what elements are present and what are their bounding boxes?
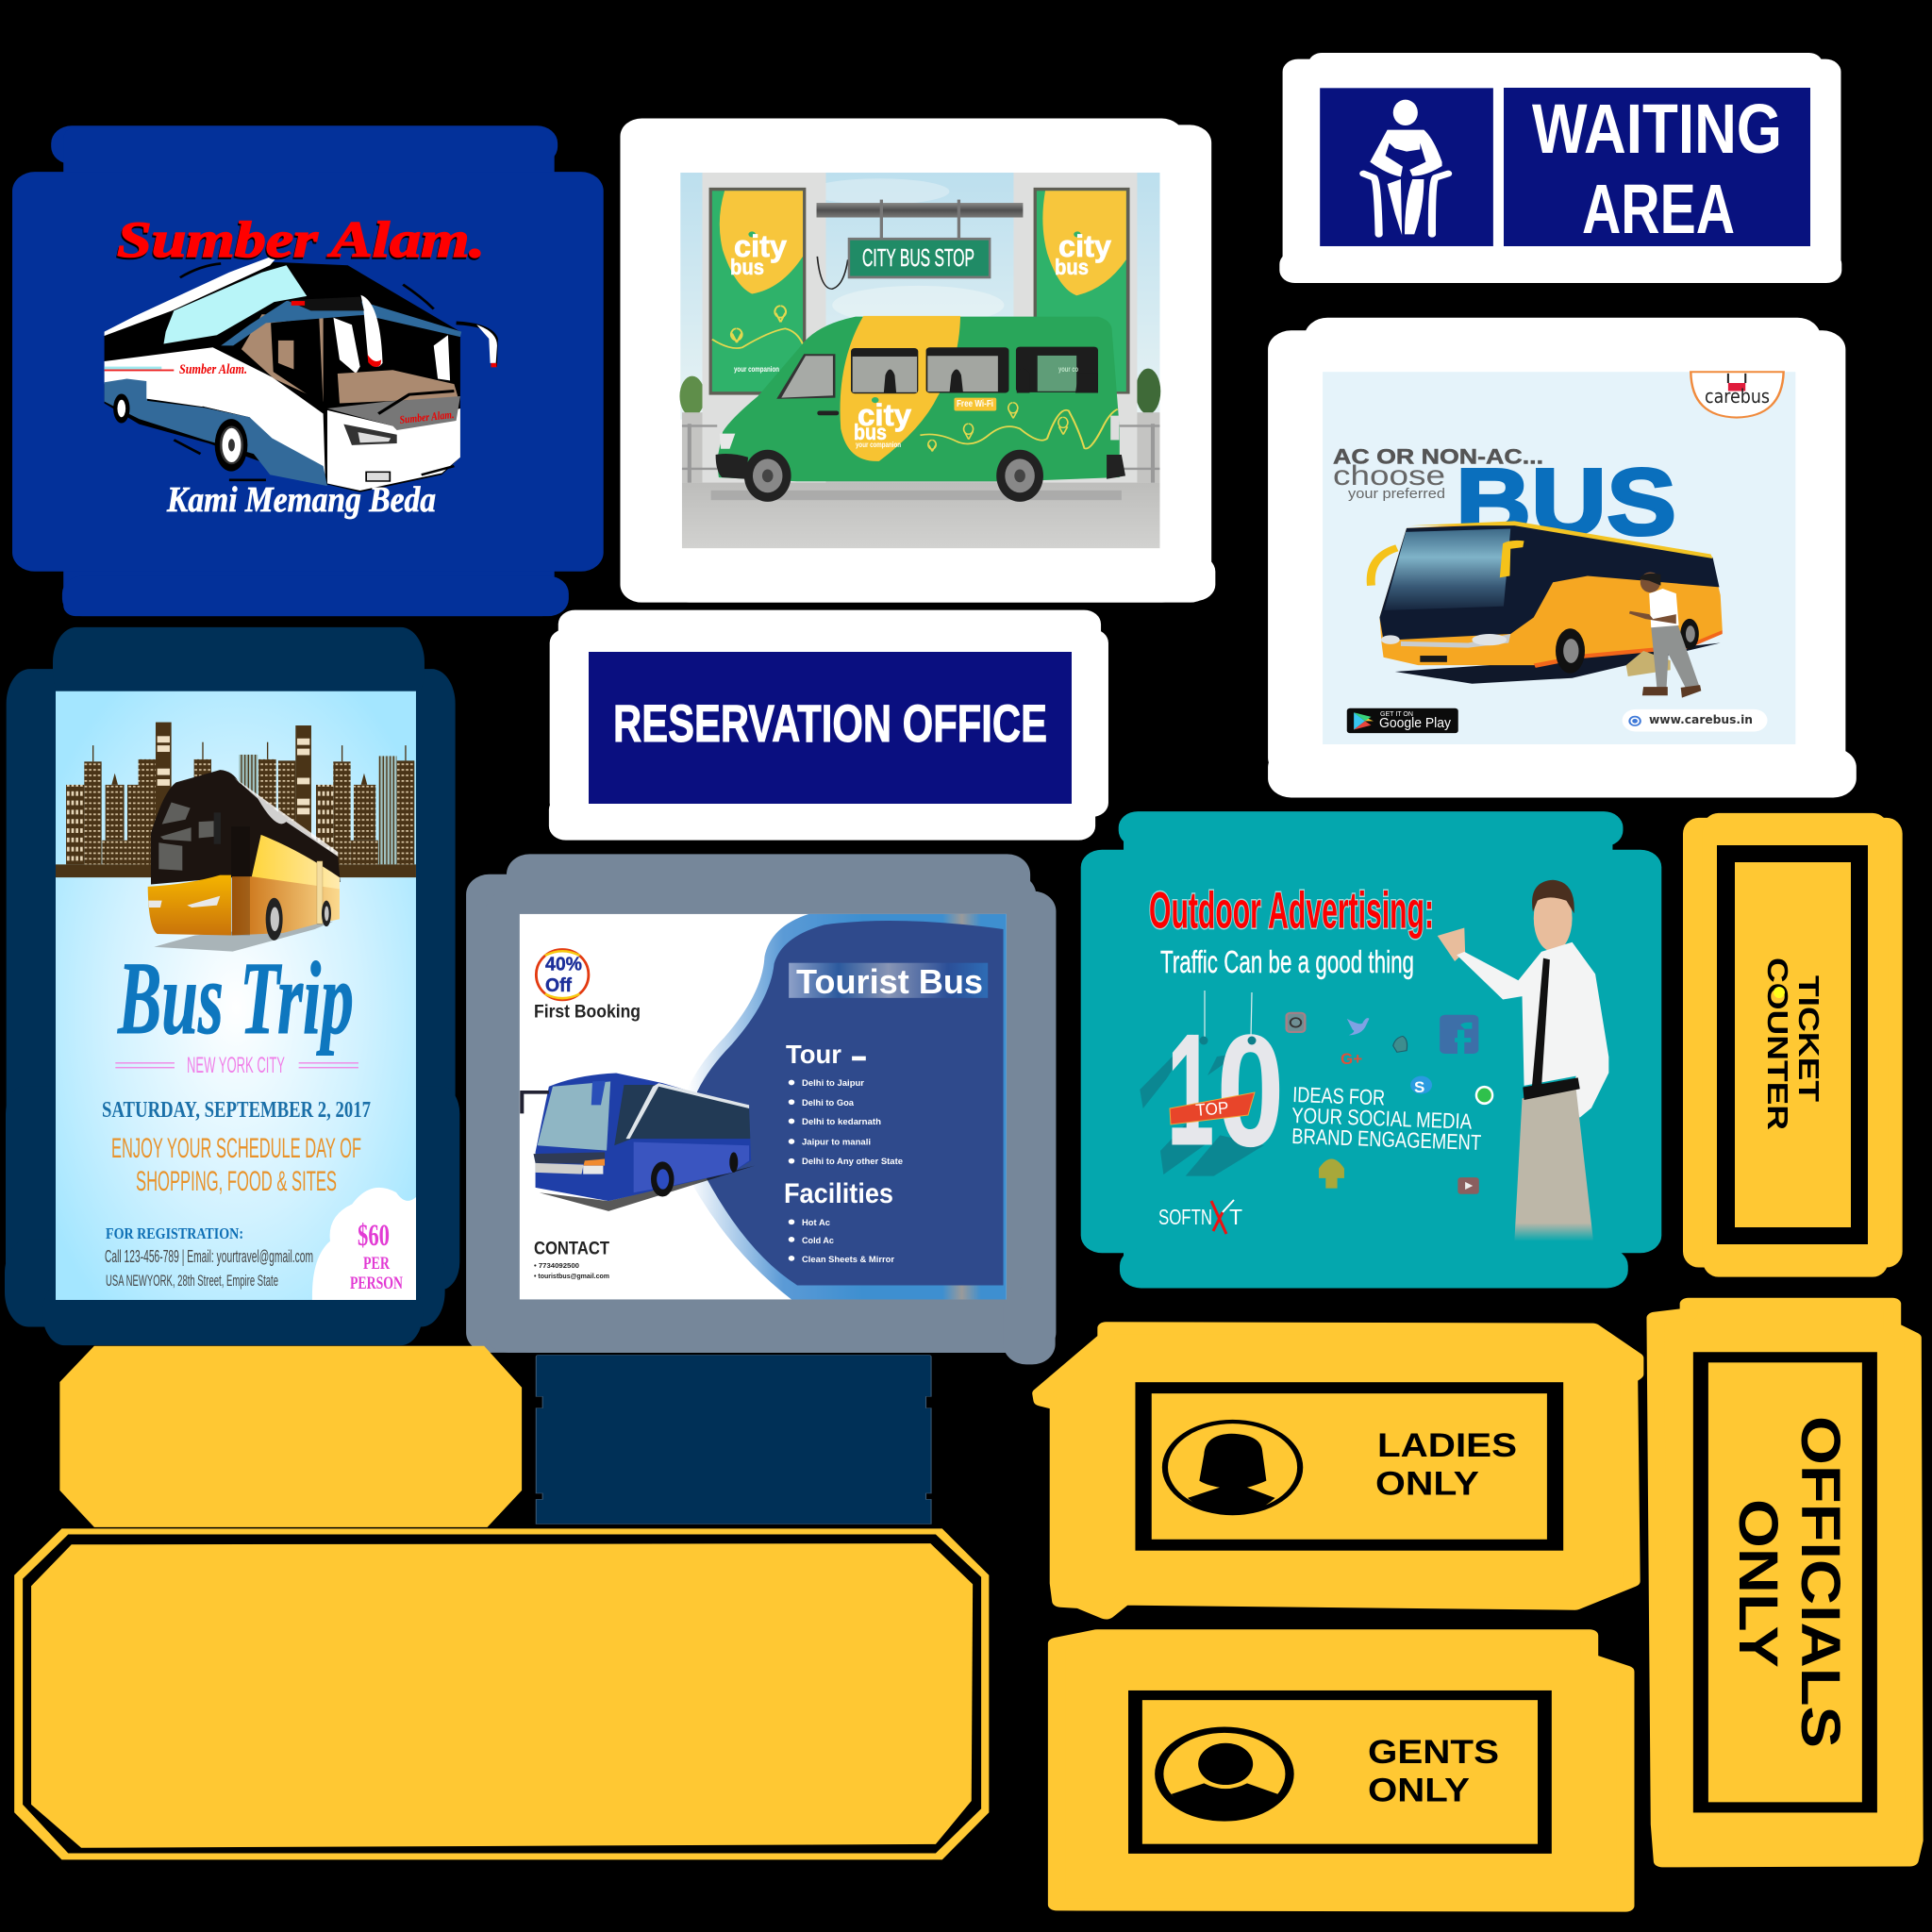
panel background: yellow <box>1041 1328 1635 1613</box>
blank yellow octagonal sign with black border <box>14 1528 989 1859</box>
panel background: yellow <box>1057 1636 1625 1906</box>
label: bus front lettering: Sumber Alam. <box>399 408 455 426</box>
price: PERSON <box>350 1274 403 1293</box>
van logo: city <box>858 398 911 432</box>
sign text: GENTS: GENTS <box>1368 1734 1499 1771</box>
icons and presenter <box>1287 880 1608 1241</box>
blank navy plate <box>536 1355 931 1524</box>
panel background: teal <box>1081 811 1661 1288</box>
sign: city bus stop: CITY BUS STOP <box>862 243 974 272</box>
billboard logo: right: your co <box>1058 364 1078 374</box>
facilities list: Clean Sheets & Mirror <box>802 1255 894 1265</box>
address line: USA NEWYORK, 28th Street, Empire State <box>106 1272 278 1290</box>
black frame <box>1725 854 1859 1236</box>
facilities list <box>784 1178 894 1265</box>
illustration: yellow coach and traveller <box>1347 521 1768 733</box>
First Booking: First Booking <box>534 1002 641 1023</box>
hanging strings <box>1205 991 1252 1038</box>
van logo: your companion <box>856 441 901 449</box>
price: $60 <box>358 1219 390 1253</box>
tour list: Delhi to Any other State <box>802 1157 903 1167</box>
ribbon: TOP: TOP <box>1195 1098 1229 1120</box>
label: bus side lettering: Sumber Alam. <box>179 362 247 377</box>
panel: Sumber Alam bus logo <box>12 125 604 616</box>
panel: Officials only sign <box>1656 1304 1914 1861</box>
email: • touristbus@gmail.com <box>534 1274 609 1280</box>
panel background: white <box>620 118 1215 603</box>
blank yellow plate <box>59 1346 522 1527</box>
tour list: Delhi to Jaipur <box>802 1078 864 1089</box>
phone number: • 7734092500 <box>534 1263 579 1270</box>
headline: choose: choose <box>1333 460 1445 491</box>
sign text: COUNTER: COUNTER <box>1761 958 1794 1130</box>
icon text: Skype: S <box>1414 1078 1424 1096</box>
panel: Tourist Bus flyer <box>466 854 1056 1364</box>
panel: waiting area sign <box>1279 53 1841 283</box>
billboard logo: left: city <box>734 229 787 263</box>
van logo: bus <box>854 420 887 444</box>
title: Outdoor Advertising: Outdoor Advertising: <box>1149 881 1434 940</box>
tour list: Tour <box>786 1040 841 1069</box>
tour list: Delhi to Goa <box>802 1098 855 1108</box>
tour list: Jaipur to manali <box>802 1138 871 1147</box>
long shadow behind the number <box>1140 1033 1264 1176</box>
tour list <box>786 1040 903 1167</box>
van logo <box>854 398 911 449</box>
discount badge text: Off <box>545 975 572 996</box>
date: SATURDAY, SEPTEMBER 2, 2017 <box>102 1098 371 1123</box>
sign text: WAITING: WAITING <box>1532 90 1782 168</box>
billboard logo: left: bus <box>730 255 764 279</box>
sign plate: waiting area <box>1504 88 1810 246</box>
heading: Sumber Alam: Sumber Alam. <box>117 211 485 268</box>
badge: Google Play: Google Play <box>1379 715 1451 731</box>
sign plate <box>589 652 1072 804</box>
sign text: TICKET: TICKET <box>1792 975 1825 1102</box>
brand: Softnext: T <box>1229 1205 1242 1229</box>
ribbon: TOP <box>1170 1092 1255 1124</box>
poster art: skyline and coach <box>56 691 416 1300</box>
panel background: white <box>1268 318 1857 797</box>
panel: Bus Trip poster <box>5 627 459 1345</box>
price: PER <box>363 1254 390 1274</box>
subtitle: Traffic Can be a good thing <box>1160 944 1414 979</box>
facilities list: Hot Ac <box>802 1218 830 1228</box>
icon: seated person <box>1320 88 1493 246</box>
panel: Ticket counter sign <box>1683 813 1903 1277</box>
scene: bus stop with green van <box>679 173 1160 548</box>
panel background: white <box>1279 53 1841 283</box>
panel: Gents only sign <box>1057 1636 1625 1906</box>
discount badge text: 40% <box>545 955 582 975</box>
description line 2: SHOPPING, FOOD & SITES <box>136 1166 337 1197</box>
sign text: ONLY: ONLY <box>1375 1466 1479 1502</box>
subtitle: New York City: NEW YORK CITY <box>187 1053 285 1078</box>
billboard logo: right: bus <box>1055 255 1089 279</box>
van label: Free Wi-Fi: Free Wi-Fi <box>957 399 993 409</box>
billboard logo: left: your companion <box>734 364 779 374</box>
panel background: blue <box>12 125 604 616</box>
flyer title: Tourist Bus <box>796 962 983 1001</box>
badge: Google Play: GET IT ON <box>1380 709 1413 718</box>
icon text: Google plus: G+ <box>1341 1050 1362 1068</box>
yellow dot artefact <box>1774 987 1785 998</box>
website address: www.carebus.in <box>1649 713 1753 726</box>
facilities list: Facilities <box>784 1178 893 1209</box>
text: ideas for: IDEAS FOR <box>1292 1082 1386 1109</box>
headline: your preferred: your preferred <box>1348 486 1445 502</box>
panel: Reservation office sign <box>549 610 1108 841</box>
text: your social media: YOUR SOCIAL MEDIA <box>1291 1103 1473 1134</box>
panel background: white <box>549 610 1108 841</box>
big number 10: 0 <box>1217 1002 1284 1179</box>
panel background: yellow <box>1683 813 1903 1277</box>
brand: Softnext <box>1158 1200 1242 1234</box>
sign text: RESERVATION OFFICE <box>613 693 1047 753</box>
brand: Softnext: SOFTN <box>1158 1205 1212 1229</box>
panel background: grey <box>466 854 1056 1364</box>
headline: AC or non-AC: AC OR NON-AC... <box>1333 445 1543 469</box>
big number 10: 1 <box>1167 1001 1214 1178</box>
background and logo badge <box>1323 372 1795 744</box>
billboard logo: left <box>730 229 787 374</box>
contact heading: CONTACT <box>534 1240 609 1259</box>
contact line: Call 123-456-789 | Email: yourtravel@gmail.com <box>105 1247 313 1266</box>
logo: carebus: carebus <box>1705 385 1770 408</box>
tagline: Kami Memang Beda <box>166 480 436 520</box>
text: brand engagement: BRAND ENGAGEMENT <box>1291 1124 1482 1155</box>
panel background: navy <box>5 627 459 1345</box>
panel: Ladies only sign <box>1041 1328 1635 1613</box>
description line 1: ENJOY YOUR SCHEDULE DAY OF <box>111 1133 361 1164</box>
headline: BUS: BUS <box>1456 450 1676 556</box>
facilities list: Cold Ac <box>802 1236 834 1246</box>
inner frame thickening <box>1717 846 1735 1243</box>
billboard logo: right: city <box>1058 229 1111 263</box>
panel: City Bus Stop mockup <box>620 118 1215 603</box>
discount badge text <box>545 955 582 996</box>
sign text: LADIES: LADIES <box>1377 1427 1517 1464</box>
tour list: Delhi to kedarnath <box>802 1117 881 1127</box>
sign text: ONLY: ONLY <box>1727 1499 1789 1668</box>
flyer art: blue curve and coach <box>520 914 1007 1299</box>
registration heading: FOR REGISTRATION: <box>106 1224 243 1242</box>
sign text: AREA: AREA <box>1582 170 1735 248</box>
panel background: yellow <box>1656 1304 1914 1861</box>
panel: Outdoor Advertising <box>1081 811 1661 1288</box>
price <box>350 1219 403 1293</box>
sign text: OFFICIALS: OFFICIALS <box>1790 1416 1851 1748</box>
illustration: white and blue coach <box>105 253 497 492</box>
title: Bus Trip: Bus Trip <box>117 941 354 1056</box>
sign text: ONLY: ONLY <box>1368 1772 1470 1809</box>
panel: Carebus advert <box>1268 318 1857 797</box>
billboard logo: right <box>1055 229 1111 374</box>
